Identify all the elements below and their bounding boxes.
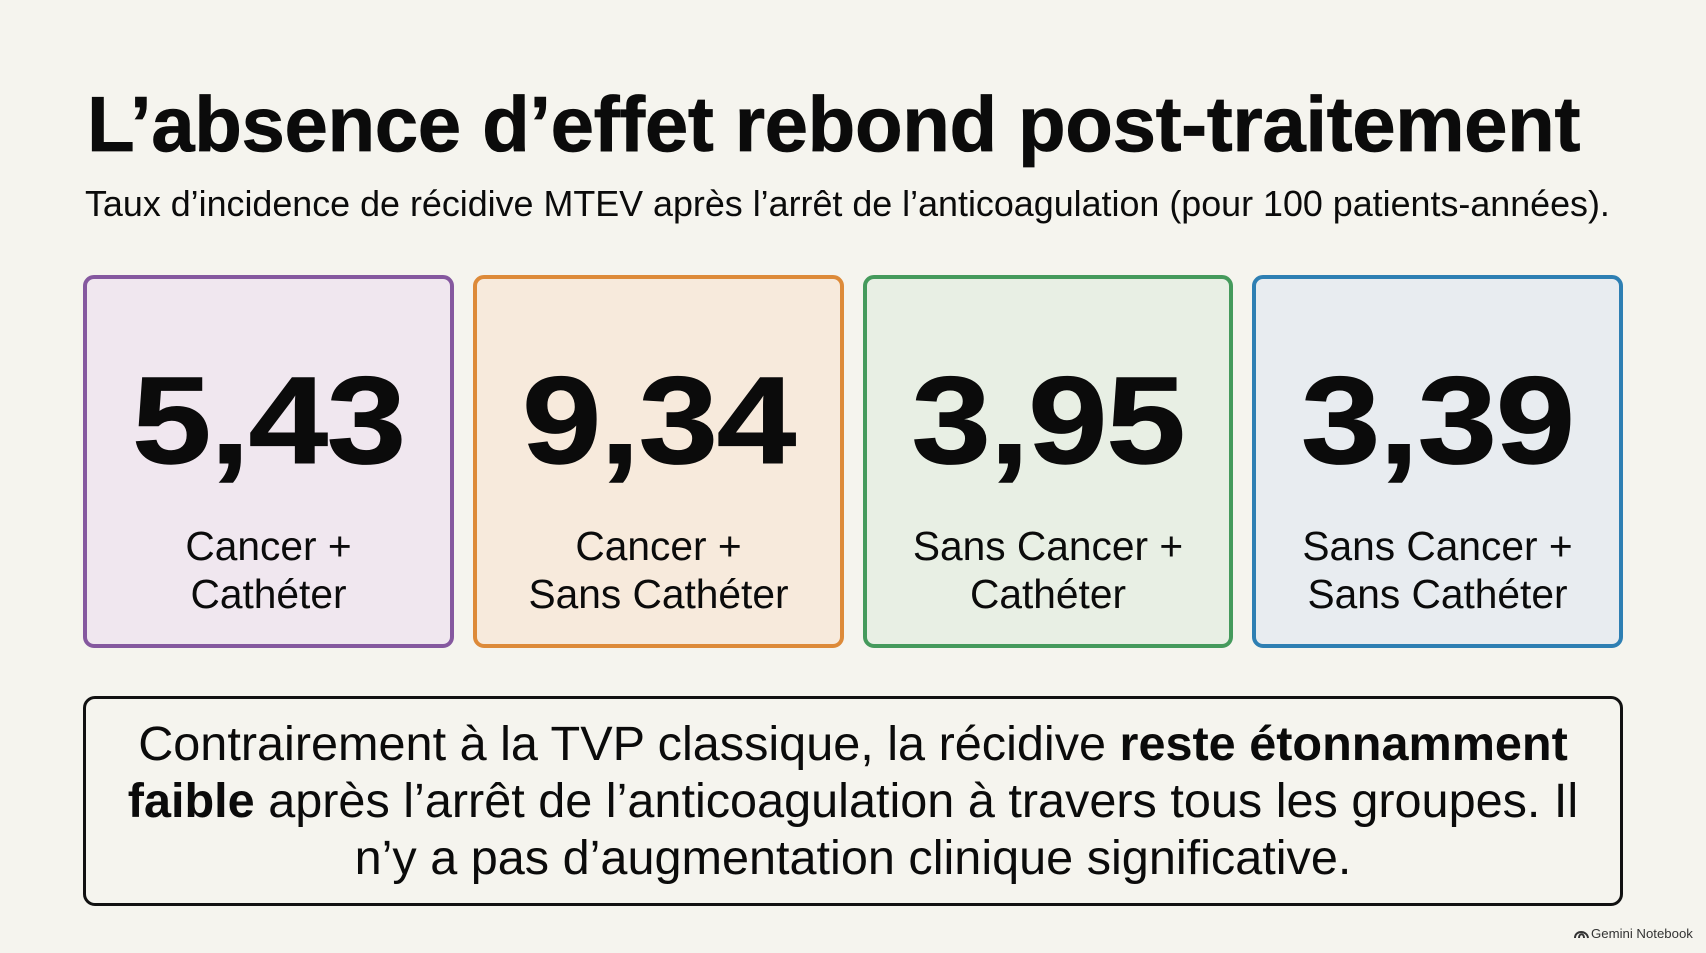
label: Sans Cancer + bbox=[913, 523, 1183, 569]
label bbox=[1302, 523, 1573, 617]
title: L’absence d’effet rebond post-traitement bbox=[87, 80, 1580, 168]
callout: faible après l’arrêt de l’anticoagulation à travers tous les groupes. Il bbox=[128, 774, 1578, 828]
label bbox=[528, 523, 789, 617]
value: 3,39 bbox=[1301, 352, 1574, 490]
label bbox=[185, 523, 352, 617]
panel: Sans Cancer + Sans Cathéter bbox=[1252, 275, 1623, 648]
watermark: Gemini Notebook: Gemini Notebook bbox=[1591, 926, 1693, 941]
callout: n’y a pas d’augmentation clinique significative. bbox=[355, 831, 1351, 885]
panel: Cancer + Cathéter bbox=[83, 275, 454, 648]
value: 9,34 bbox=[522, 352, 795, 490]
label: Cathéter bbox=[190, 571, 347, 617]
value: 3,95 bbox=[912, 352, 1184, 490]
callout: Contrairement à la TVP classique, la récidive reste étonnamment bbox=[138, 717, 1568, 771]
label: Sans Cathéter bbox=[528, 571, 789, 617]
subtitle: Taux d’incidence de récidive MTEV après l’arrêt de l’anticoagulation (pour 100 patients-années). bbox=[85, 184, 1610, 224]
value: 5,43 bbox=[132, 352, 405, 490]
label bbox=[913, 523, 1183, 617]
callout bbox=[83, 696, 1623, 906]
label: Cancer + bbox=[185, 523, 352, 569]
panel: Sans Cancer + Cathéter bbox=[863, 275, 1233, 648]
label: Cancer + bbox=[575, 523, 742, 569]
label: Sans Cathéter bbox=[1307, 571, 1568, 617]
label: Sans Cancer + bbox=[1302, 523, 1573, 569]
label: Cathéter bbox=[970, 571, 1126, 617]
panel: Cancer + Sans Cathéter bbox=[473, 275, 844, 648]
